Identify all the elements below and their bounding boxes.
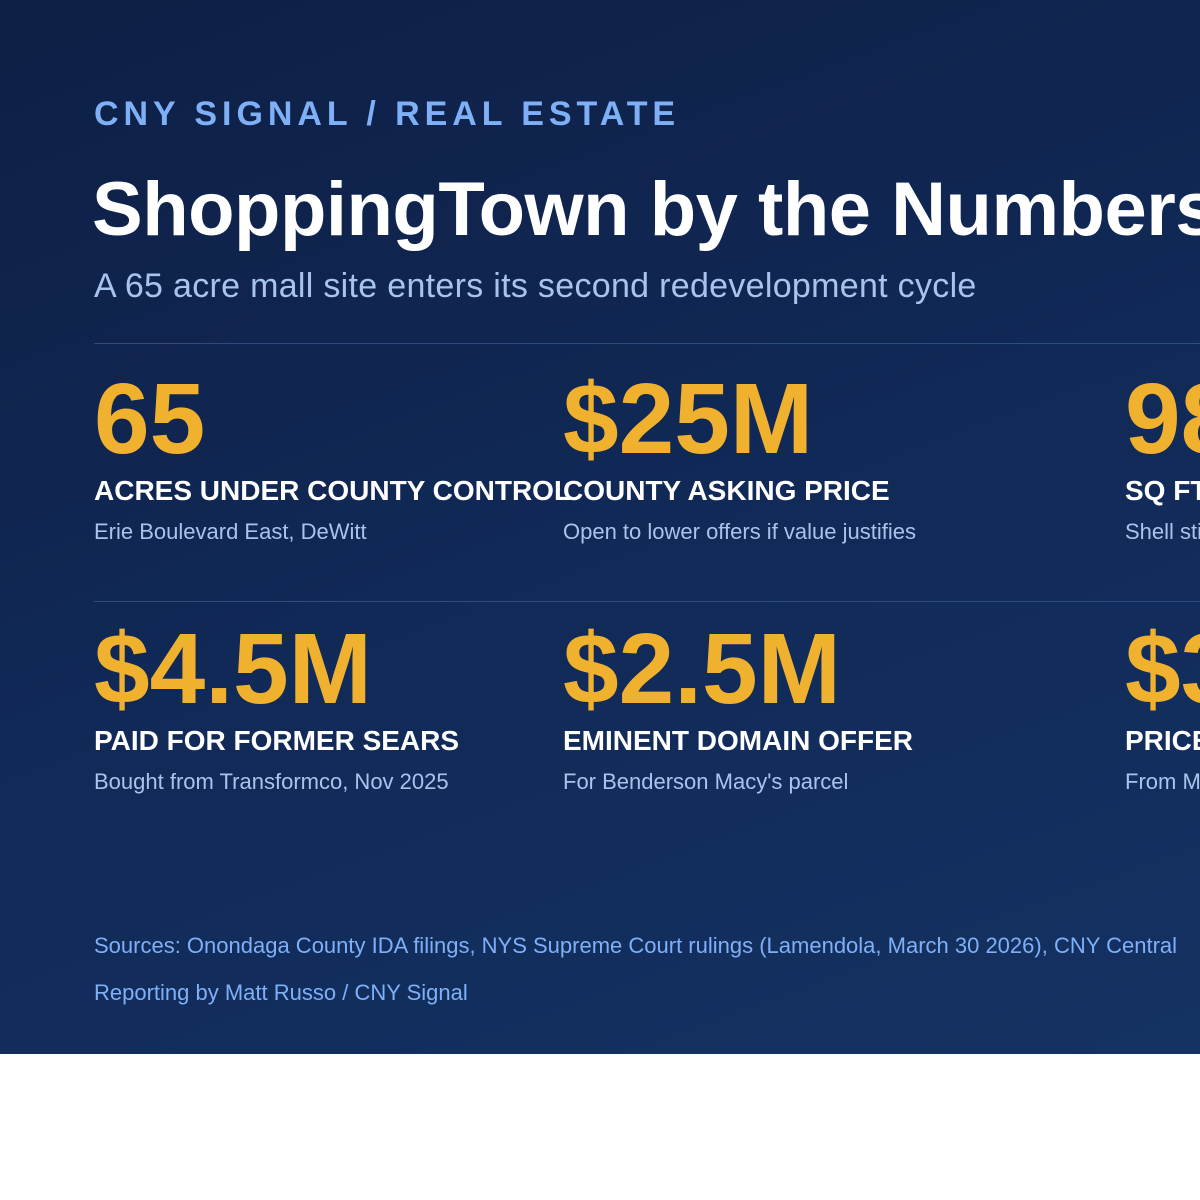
stat: $2.5M: For Benderson Macy's parcel (563, 769, 848, 794)
stat: $25M (563, 363, 916, 544)
stat: $2.5M (563, 613, 913, 794)
stat: $4.5M (94, 613, 459, 794)
stat: $4.5M: $4.5M (94, 613, 372, 725)
stat: $4.5M: Bought from Transformco, Nov 2025 (94, 769, 449, 794)
stat: $2.5M: EMINENT DOMAIN OFFER (563, 725, 913, 756)
credit: Reporting by Matt Russo / CNY Signal (94, 980, 468, 1005)
stat: 65 acres: 65 (94, 363, 205, 475)
stat: 65 acres: ACRES UNDER COUNTY CONTROL (94, 475, 571, 506)
subtitle: A 65 acre mall site enters its second redevelopment cycle (94, 267, 977, 305)
stat: 65 acres (94, 363, 571, 544)
stat: price (1125, 613, 1200, 794)
sources: Sources: Onondaga County IDA filings, NYS Supreme Court rulings (Lamendola, March 30 2026), CNY Central (94, 933, 1177, 958)
stat: $25M: COUNTY ASKING PRICE (563, 475, 890, 506)
stat: $25M: $25M (563, 363, 813, 475)
stat: $25M: Open to lower offers if value justifies (563, 519, 916, 544)
stat: $2.5M: $2.5M (563, 613, 841, 725)
stat: sq ft (1125, 363, 1200, 544)
kicker: CNY SIGNAL / REAL ESTATE (94, 95, 680, 133)
title: ShoppingTown by the Numbers (92, 167, 1200, 252)
stat: 65 acres: Erie Boulevard East, DeWitt (94, 519, 367, 544)
stat: $4.5M: PAID FOR FORMER SEARS (94, 725, 459, 756)
